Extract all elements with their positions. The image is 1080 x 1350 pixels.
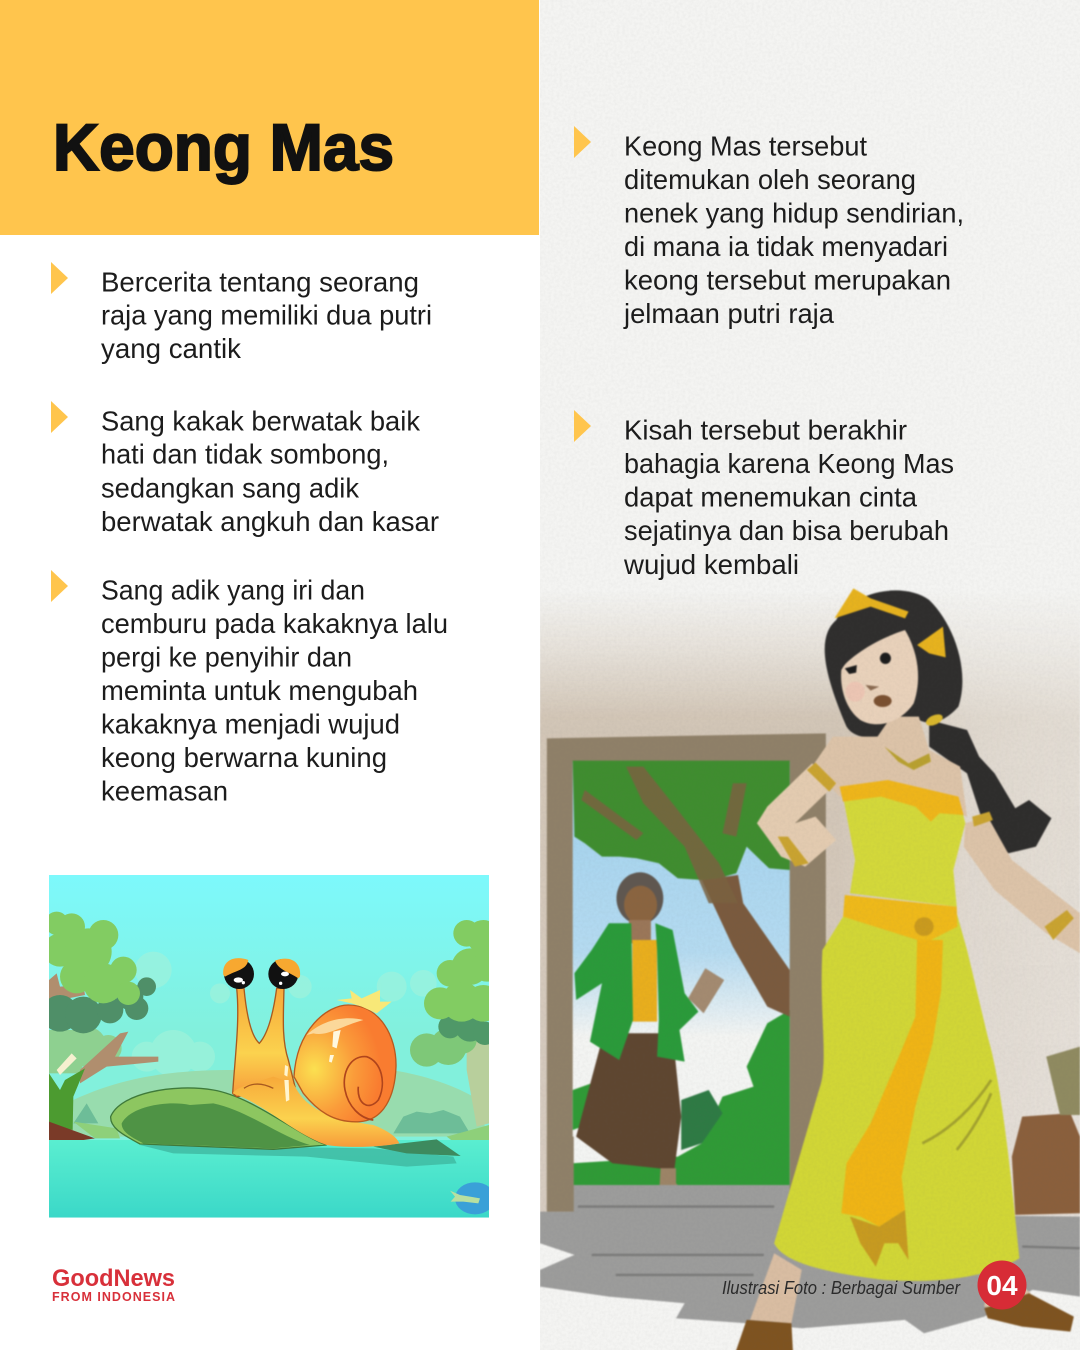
point 5: wujud kembali (623, 549, 799, 580)
leaf tip (373, 1139, 461, 1156)
arrow marker 2 (51, 401, 68, 433)
door frame (547, 733, 826, 1212)
shell spiral (344, 1057, 382, 1120)
blue fish (450, 1182, 495, 1214)
left tree branches (49, 973, 158, 1083)
dark bush clump (681, 1090, 723, 1150)
point 2: hati dan tidak sombong, (101, 439, 389, 470)
far forest (73, 1103, 470, 1133)
point 4: nenek yang hidup sendirian, (624, 197, 964, 228)
face (841, 630, 918, 724)
man foot (658, 1167, 678, 1186)
man jacket (574, 923, 698, 1062)
door post base (572, 1136, 575, 1212)
nose (865, 685, 879, 691)
illustration: sad golden snail on a leaf (42, 875, 502, 1218)
sash (841, 940, 943, 1227)
broom (1046, 1047, 1080, 1115)
skirt (774, 913, 1019, 1281)
point 4: jelmaan putri raja (623, 298, 834, 329)
tree foliage (573, 761, 790, 880)
point 3: cemburu pada kakaknya lalu (101, 608, 448, 639)
grass bank (73, 1122, 489, 1142)
braid (929, 720, 1051, 853)
clouds (132, 952, 437, 1077)
belt buckle (914, 917, 934, 936)
panel: title header (0, 0, 539, 235)
floor cracks (578, 1207, 1080, 1275)
left arm (757, 763, 836, 867)
page number badge: 04 (986, 1270, 1018, 1301)
logo: GoodNews from Indonesia: GoodNews (52, 1265, 175, 1292)
point 5: Kisah tersebut berakhir (624, 414, 907, 445)
shell highlight (307, 1018, 363, 1035)
belt (843, 895, 957, 943)
mouth (874, 695, 892, 707)
wall (540, 590, 1080, 1223)
man in green jacket (574, 872, 724, 1217)
fringe (846, 630, 906, 664)
point 3: kakaknya menjadi wujud (101, 708, 400, 740)
point 5: dapat menemukan cinta (624, 482, 917, 512)
floor (540, 1185, 1080, 1333)
panel: left white background (0, 0, 540, 1350)
sash fringe (850, 1210, 909, 1267)
point 4 (574, 126, 964, 329)
skirt fold lines (922, 1080, 991, 1150)
sky (49, 875, 489, 1142)
arrow marker 1 (51, 262, 68, 294)
earring (925, 713, 944, 727)
title: Keong Mas (53, 110, 394, 184)
snail shell (294, 1005, 396, 1122)
shore left (49, 1122, 95, 1145)
logo: GoodNews from Indonesia: FROM INDONESIA (52, 1290, 175, 1304)
logo: GoodNews from Indonesia (52, 1265, 175, 1304)
distant hills (49, 1070, 489, 1137)
point 1 (51, 262, 432, 364)
shell tears (329, 1030, 341, 1063)
point 2: Sang kakak berwatak baik (101, 405, 421, 436)
door opening (573, 762, 790, 1185)
bullet list: right column (574, 126, 964, 580)
back hair (825, 590, 962, 737)
princess figure (735, 588, 1080, 1350)
man face (624, 886, 657, 924)
left eye (223, 958, 254, 989)
point 4: keong tersebut merupakan (624, 264, 951, 296)
cheek blush (845, 682, 865, 702)
right eye (268, 959, 300, 989)
caption: photo credit: Ilustrasi Foto : Berbagai Sumber (722, 1278, 961, 1298)
clay pot (1012, 1113, 1080, 1215)
flower crown (337, 990, 392, 1013)
point 3 (51, 570, 448, 806)
man head (616, 872, 663, 924)
crown (834, 588, 909, 618)
eyes (845, 665, 857, 674)
snail frown (244, 1084, 273, 1088)
point 4: ditemukan oleh seorang (624, 164, 916, 195)
point 4: di mana ia tidak menyadari (624, 231, 948, 262)
leaf dark inner (122, 1103, 310, 1148)
man neck (629, 920, 651, 943)
leaf shadow (140, 1145, 457, 1167)
paper texture (540, 0, 1080, 1350)
point 5: bahagia karena Keong Mas (624, 448, 954, 479)
page number badge (978, 1260, 1026, 1310)
illustration: princess and man at a doorway (540, 588, 1080, 1350)
point 3: pergi ke penyihir dan (101, 641, 352, 672)
tree branches (581, 767, 747, 903)
arm bands (778, 763, 1074, 940)
neck and chest (812, 717, 967, 817)
right tree trunk (467, 1030, 489, 1127)
snail stalks (233, 988, 295, 1097)
snail body (233, 1077, 399, 1147)
man raised hand (688, 968, 724, 1013)
necklace (884, 747, 931, 770)
right arm (964, 817, 1080, 953)
bullet list: left column (51, 262, 448, 806)
point 2: berwatak angkuh dan kasar (101, 506, 439, 537)
left shoe (735, 1320, 793, 1350)
arrow marker 5 (574, 410, 591, 442)
grass and reed (49, 1053, 85, 1130)
right shoe (984, 1293, 1074, 1332)
point 3: keong berwarna kuning (101, 742, 387, 773)
ankle (984, 1283, 1031, 1310)
tree trunk (702, 875, 790, 1017)
right tree foliage (410, 920, 502, 1067)
man shirt (632, 940, 657, 1022)
point 4: Keong Mas tersebut (624, 130, 867, 161)
point 3: Sang adik yang iri dan (101, 574, 365, 605)
panel: right paper background (540, 0, 1080, 1350)
bushes through the door (573, 1010, 790, 1185)
point 2: sedangkan sang adik (101, 472, 360, 503)
left tree lower foliage (47, 1027, 122, 1073)
point 5: sejatinya dan bisa berubah (624, 515, 949, 546)
tear streak on body (284, 1065, 289, 1102)
point 3: keemasan (101, 776, 228, 806)
bodice trim (840, 780, 964, 822)
arrow marker 3 (51, 570, 68, 602)
leaf (111, 1088, 327, 1149)
hair ornament (917, 627, 946, 657)
point 3: meminta untuk mengubah (101, 675, 418, 706)
point 1: yang cantik (101, 333, 242, 364)
water (49, 1140, 489, 1218)
point 2 (51, 401, 439, 537)
bodice (843, 793, 965, 907)
man skirt (576, 1033, 681, 1170)
point 1: raja yang memiliki dua putri (101, 300, 432, 331)
point 5 (574, 410, 954, 580)
left tree foliage (42, 912, 156, 1033)
arrow marker 4 (574, 126, 591, 158)
point 1: Bercerita tentang seorang (101, 266, 419, 297)
leg (750, 1253, 802, 1323)
